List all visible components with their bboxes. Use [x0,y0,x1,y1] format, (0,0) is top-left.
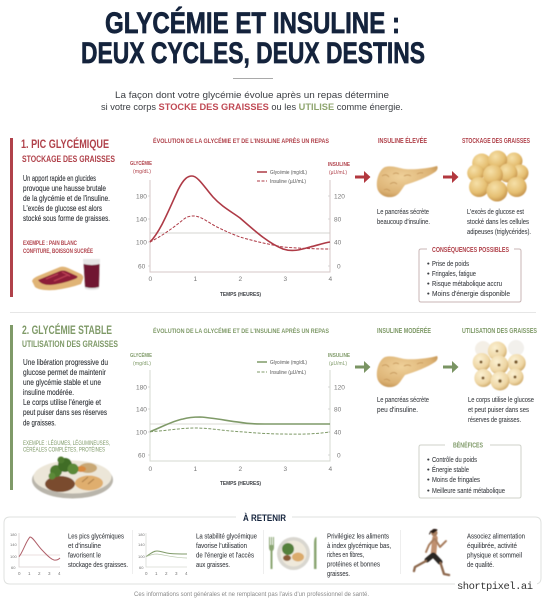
callout: conséquences possibles: Fringales, fatigue [432,269,476,278]
text block: description pic: de la glycémie et de l'insuline. [23,193,110,203]
heading: glycémie stable: UTILISATION DES GRAISSES [22,339,118,350]
y axis right labels: 80 [334,406,342,414]
icon: pancreas [377,166,438,197]
y axis left labels: 140 [136,406,147,414]
title [81,6,425,70]
y axis right labels: INSULINE [328,162,351,168]
callout: conséquences possibles: Moins d'énergie disponible [432,289,510,298]
callout: conséquences possibles [419,245,521,302]
example text [23,440,110,454]
text block: description stable [23,357,108,428]
mini chart: pic: 140 [10,542,17,547]
fat use column: réserves de graisses. [468,415,521,424]
arrow [355,361,370,373]
legend [257,170,307,185]
x axis labels: 0 [148,466,152,473]
y axis right labels [328,162,351,270]
legend: Glycémie (mg/dL) [270,170,307,176]
text: pics: et d'insuline [68,541,101,550]
mini chart: pic: 4 [58,571,61,576]
x axis labels: 3 [284,466,288,473]
mini chart: stable: 60 [139,565,144,570]
y axis left labels: 180 [136,194,147,200]
y axis right labels: 0 [337,452,341,460]
callout: bénéfices [419,440,521,498]
callout: bénéfices: • [427,486,430,495]
callout: bénéfices: Moins de fringales [432,475,480,484]
text: stabilité: La stabilité glycémique [196,532,257,540]
x axis labels: 2 [238,466,242,473]
text block: description pic: L'excès de glucose est alors [23,203,102,213]
y axis left labels: (mg/dL) [133,169,151,175]
x axis labels: TEMPS (HEURES) [220,481,261,487]
callout: bénéfices: • [427,475,430,484]
fat storage column [462,138,531,236]
text: aliments [327,532,391,578]
curve: insuline [150,428,330,434]
x axis labels: 0 [148,276,152,283]
text block: description pic [23,173,110,223]
mini chart: stable: 140 [138,542,145,547]
watermark: shortpixel.ai [457,581,533,593]
text: pics: stockage des graisses. [68,560,128,569]
text: pics: Les pics glycémiques [68,532,124,540]
heading: glycémie stable: 2. GLYCÉMIE STABLE [22,322,112,337]
text: stabilité: favorise l'utilisation [196,541,247,550]
text block: description stable: insuline modérée. [23,387,74,397]
y axis right labels: 120 [334,384,345,392]
y axis left labels [130,159,153,270]
callout: conséquences possibles: • [427,289,430,298]
mini chart: stable: 100 [138,554,145,559]
heading: glycémie stable [22,322,118,350]
chart: glycémie et insuline stable: ÉVOLUTION DE LA GLYCÉMIE ET DE L'INSULINE APRÈS UN REPAS [153,326,330,335]
mini chart: stable: 2 [165,571,168,576]
mini chart: stable: 1 [155,571,158,576]
legend: Glycémie (mg/dL) [270,360,307,366]
title: GLYCÉMIE ET INSULINE : [105,6,400,40]
curve: glycémie [150,176,330,250]
icon: plate with cutlery [269,537,316,570]
y axis left labels: GLYCÉMIE [130,159,153,167]
insulin high column [377,136,438,226]
mini chart: stable: 180 [138,532,145,537]
example text: CÉRÉALES COMPLÈTES, PROTÉINES [23,446,105,454]
text: alimentation: équilibrée, activité [467,541,517,550]
y axis left labels: 100 [136,240,147,246]
x axis labels: 4 [328,276,332,283]
mini chart: pic: 1 [28,571,31,576]
y axis right labels [328,353,351,460]
y axis right labels: 80 [334,216,342,224]
example text: CONFITURE, BOISSON SUCRÉE [23,247,93,255]
text block: description stable: glucose permet de maintenir [23,367,106,377]
legend: Insuline (µU/mL) [270,179,306,185]
insulin high column: beaucoup d'insuline. [377,217,430,226]
y axis left labels: 60 [138,452,146,460]
text block: description stable: une glycémie stable et une [23,377,101,387]
icon: pancreas [377,356,438,387]
example text: EXEMPLE : PAIN BLANC [23,241,78,247]
insulin moderate column: INSULINE MODÉRÉE [377,326,431,335]
fat storage column: L'excès de glucose est [467,207,525,216]
callout: bénéfices: • [427,465,430,474]
callout: bénéfices: Contrôle du poids [432,455,477,464]
text block: description stable: peut puiser dans ses réserves [23,407,107,417]
subtitle [101,90,403,113]
text: stabilité: de l'énergie et l'accès [196,550,254,560]
text: alimentation: de qualité. [467,560,494,569]
y axis left labels: 180 [136,384,147,392]
fat use column [462,328,537,424]
mini chart: stable [138,532,188,576]
callout: bénéfices: BÉNÉFICES [453,440,483,450]
x axis labels: 3 [284,276,288,283]
subtitle: La façon dont votre glycémie évolue après un repas détermine [115,90,389,101]
legend: Insuline (µU/mL) [270,370,306,376]
callout: conséquences possibles: Risque métabolique accru [432,279,502,288]
icon: plate of food [32,456,113,498]
text: alimentation: Associez alimentation [467,532,525,540]
text: aliments: Privilégiez les aliments [327,532,389,540]
curve: glycémie [150,417,330,432]
footer disclaimer: Ces informations sont générales et ne remplacent pas l'avis d'un professionnel de santé. [134,591,369,598]
mini chart: stable: 4 [185,571,188,576]
y axis left labels: 60 [138,264,146,270]
y axis right labels: 40 [334,430,342,436]
x axis labels [148,466,332,487]
heading: pic glycémique: 1. PIC GLYCÉMIQUE [21,136,109,151]
x axis labels: 2 [238,276,242,283]
text: pics: favorisent le [68,550,101,560]
mini chart: pic: 2 [38,571,41,576]
mini chart: pic: 0 [18,571,21,576]
x axis labels: 1 [194,276,198,283]
chart: glycémie et insuline stable [130,326,351,487]
icon: fat cells [467,150,528,202]
text: alimentation: physique et sommeil [467,550,522,560]
chart: glycémie et insuline pic: ÉVOLUTION DE LA GLYCÉMIE ET DE L'INSULINE APRÈS UN REPAS [153,136,330,145]
x axis labels: 4 [328,466,332,473]
text: alimentation [467,532,525,569]
chart: glycémie et insuline pic [130,136,351,298]
y axis right labels: INSULINE [328,353,351,359]
x axis labels [148,276,332,298]
mini chart: pic: 60 [11,565,16,570]
callout: bénéfices: Énergie stable [432,465,469,474]
legend [257,360,307,376]
text block: description stable: Une libération progressive du [23,357,108,367]
x axis labels: TEMPS (HEURES) [220,292,261,298]
icon: toast and juice [32,259,100,290]
text block: description pic: provoque une hausse brutale [23,183,106,193]
y axis right labels: (µU/mL) [329,170,347,176]
panel: à retenir [4,513,541,584]
y axis left labels: 100 [136,430,147,436]
y axis left labels: 140 [136,216,147,224]
curve: insuline [150,216,330,249]
mini chart: stable: 0 [145,571,148,576]
text: stabilité [196,532,257,569]
arrow [355,171,370,183]
text: aliments: riches en fibres, [327,550,364,559]
callout: conséquences possibles: CONSÉQUENCES POSSIBLES [432,245,509,254]
y axis left labels: GLYCÉMIE [130,351,153,359]
text: aliments: à index glycémique bas, [327,541,391,550]
panel: glycémie stable [10,322,537,498]
callout: bénéfices: • [427,455,430,464]
mini chart: pic: 180 [10,532,17,537]
y axis right labels: 120 [334,194,345,200]
text: stabilité: aux graisses. [196,560,230,569]
text block: description stable: de graisses. [23,418,56,428]
arrow [443,171,458,183]
callout: conséquences possibles: Prise de poids [432,259,469,268]
subtitle: si votre corps STOCKE DES GRAISSES ou les UTILISE comme énergie. [101,102,403,113]
heading: pic glycémique: STOCKAGE DES GRAISSES [22,154,115,165]
panel: pic glycémique [10,136,531,302]
section bar green [10,325,13,490]
y axis left labels [130,351,153,460]
callout: conséquences possibles: • [427,259,430,268]
heading: à retenir: À RETENIR [243,513,286,524]
section bar red [10,138,13,297]
callout: conséquences possibles: • [427,269,430,278]
y axis right labels: 0 [337,264,341,270]
example text: EXEMPLE : LÉGUMES, LÉGUMINEUSES, [23,440,110,447]
icon: shrinking fat cells [473,340,526,390]
text block: description stable: Le corps utilise l'énergie et [23,397,101,407]
text: aliments: graisses. [327,569,350,578]
mini chart: pic: 3 [48,571,51,576]
mini chart: stable: 3 [175,571,178,576]
y axis right labels: (µU/mL) [329,361,347,367]
mini chart: pic: 100 [10,554,17,559]
callout: bénéfices: Meilleure santé métabolique [432,486,505,495]
title: DEUX CYCLES, DEUX DESTINS [81,37,425,70]
text: pics [68,532,128,569]
heading: pic glycémique [21,136,115,165]
text block: description pic: Un apport rapide en glucides [23,173,96,183]
insulin high column: INSULINE ÉLEVÉE [378,136,427,145]
insulin moderate column: peu d'insuline. [377,405,418,414]
y axis right labels: 40 [334,240,342,246]
example text [23,241,93,255]
insulin moderate column: Le pancréas sécrète [377,395,429,404]
insulin high column: Le pancréas sécrète [377,207,429,216]
icon: runner [414,529,449,575]
x axis labels: 1 [194,466,198,473]
y axis left labels: (mg/dL) [133,361,151,367]
text block: description pic: stocké sous forme de graisses. [23,213,110,223]
arrow [443,361,458,373]
callout: conséquences possibles: • [427,279,430,288]
text: aliments: protéines et bonnes [327,560,380,568]
insulin moderate column [377,326,438,414]
mini chart: pic [10,532,61,576]
